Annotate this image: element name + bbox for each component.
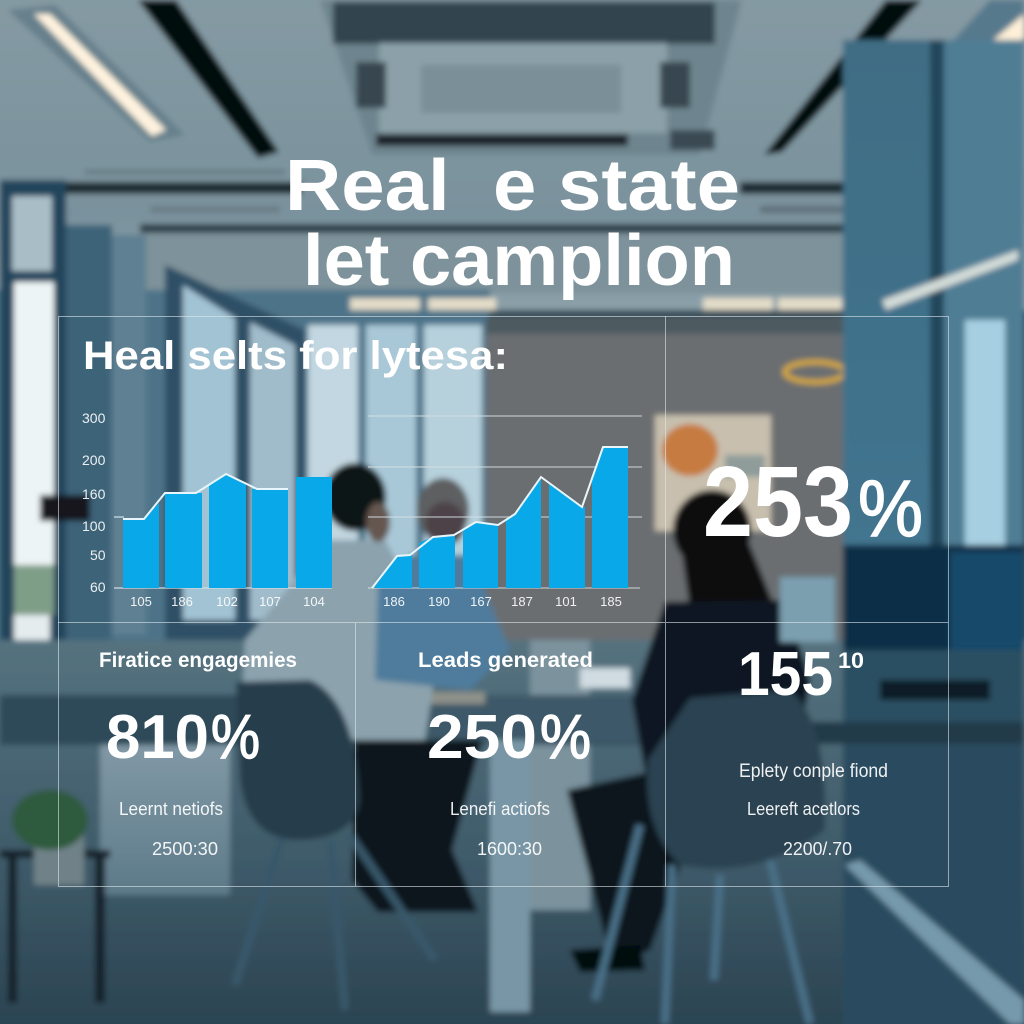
stat panel: 155: 10: [838, 648, 864, 673]
pendant lamp: [785, 362, 845, 382]
right chart x axis labels: 185: [600, 594, 622, 609]
left chart x axis labels: 186: [171, 594, 193, 609]
stat panel: engagement: %: [211, 703, 260, 772]
left chart x axis labels: 102: [216, 594, 238, 609]
meeting table: [0, 722, 1024, 744]
stat panel: 155: [738, 640, 888, 859]
right chart x axis labels: 190: [428, 594, 450, 609]
left chart y axis labels: 160: [82, 486, 106, 502]
person: woman on right: [673, 490, 751, 570]
wall and windows: [0, 290, 490, 650]
right chart x axis labels: 167: [470, 594, 492, 609]
left chart x axis labels: [130, 594, 325, 609]
ceiling: [0, 0, 1024, 310]
stat panel: leads generated: Lenefi actiofs: [450, 799, 550, 819]
stat panel: leads generated: 1600:30: [477, 839, 542, 859]
stat panel: leads generated: 250: [427, 703, 537, 772]
floor: [0, 640, 1024, 1024]
left chart x axis labels: 105: [130, 594, 152, 609]
visitor chair behind woman: [780, 577, 835, 642]
title: let camplion: [303, 221, 735, 301]
left chart y axis labels: 200: [82, 452, 106, 468]
stat panel: engagement: Leernt netiofs: [119, 799, 223, 819]
right chart x axis labels: 187: [511, 594, 533, 609]
left chart y axis labels: 100: [82, 518, 106, 534]
dashboard grid frame: [58, 316, 948, 886]
stat panel: 155: Leereft acetlors: [747, 799, 860, 819]
chair: right: [647, 690, 825, 868]
big stat: 253%: 253: [703, 446, 853, 558]
stat panel: engagement: 2500:30: [152, 839, 218, 859]
left chart y axis labels: [82, 410, 106, 595]
stat panel: leads generated: %: [540, 703, 591, 772]
right chart bars: [374, 447, 628, 588]
plant and shelf: [0, 850, 110, 858]
stat panel: 155: Eplety conple fiond: [739, 761, 888, 782]
panel heading: Heal selts for lytesa:: [83, 334, 508, 378]
left chart x axis labels: 104: [303, 594, 325, 609]
right chart x axis labels: 101: [555, 594, 577, 609]
stat panel: engagement: Firatice engagemies: [99, 649, 297, 672]
bar chart: right: [368, 416, 642, 609]
stat panel: 155: 155: [738, 640, 833, 709]
left chart y axis labels: 50: [90, 547, 106, 563]
person: man in centre: [375, 555, 510, 690]
stat panel: engagement: 810: [106, 703, 209, 772]
stat panel: 155: 2200/.70: [783, 839, 852, 859]
person: man on left: [240, 540, 440, 740]
title: [285, 146, 740, 301]
framed picture: [655, 415, 771, 531]
right chart x axis labels: [383, 594, 622, 609]
title: Real e state: [285, 146, 740, 226]
left chart y axis labels: 300: [82, 410, 106, 426]
stat panel: engagement: [99, 649, 297, 859]
left chart bars: [123, 474, 332, 588]
chair: left: [236, 680, 360, 840]
stat panel: leads generated: [418, 649, 593, 859]
right chart x axis labels: 186: [383, 594, 405, 609]
bar chart: left: [82, 410, 332, 609]
left chart x axis labels: 107: [259, 594, 281, 609]
big stat: 253%: %: [858, 464, 923, 553]
stat panel: leads generated: Leads generated: [418, 649, 593, 672]
left chart y axis labels: 60: [90, 579, 106, 595]
right glass partition and monitor: [843, 40, 943, 550]
